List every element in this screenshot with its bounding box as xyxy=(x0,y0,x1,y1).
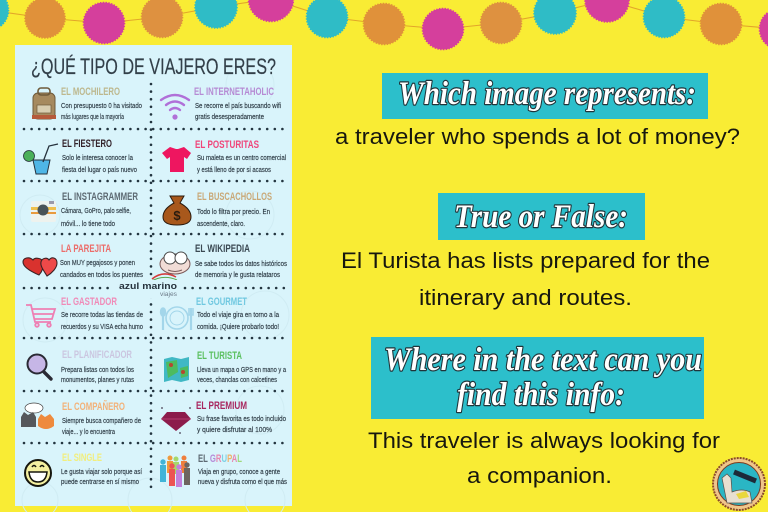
icon: hearts xyxy=(23,258,57,276)
entry: El Mochilero: más lugares que la mayoría xyxy=(61,112,125,121)
entry: El Premium: Su frase favorita es todo incluido xyxy=(197,414,286,423)
entry: El Posturitas: Su maleta es un centro comercial xyxy=(197,153,286,162)
question 2 heading box xyxy=(438,193,645,240)
entry: El Grupal: EL GRUPAL xyxy=(198,453,242,465)
entry: El Planificador: Prepara listas con todos los xyxy=(61,365,134,374)
entry: El Gourmet: comida. ¡Quiere probarlo todo! xyxy=(197,322,279,331)
entry: El Buscachollos: ascendente, claro. xyxy=(197,219,245,228)
entry: El Turista: Lleva un mapa o GPS en mano y a xyxy=(197,365,287,374)
logo: azul marino viajes xyxy=(117,274,179,298)
entry: El Grupal: Viaja en grupo, conoce a gente xyxy=(198,467,280,476)
entry: El Grupal xyxy=(160,453,287,487)
dotted grid xyxy=(24,84,288,488)
question 3 heading box xyxy=(371,337,704,419)
entry: El Compañero: viaje... y lo encuentra xyxy=(62,427,116,436)
title: ¿QUÉ TIPO DE VIAJERO ERES? xyxy=(31,54,276,79)
entry: El Instagrammer: Cámara, GoPro, palo selfie, xyxy=(61,206,131,215)
entry: El Planificador: monumentos, planes y rutas xyxy=(61,375,134,384)
entry: El Instagrammer: EL INSTAGRAMMER xyxy=(62,191,138,203)
entry: El Gastador: recuerdos y su VISA echa humo xyxy=(61,322,143,331)
entry: El Turista xyxy=(164,350,287,384)
entry: El Gastador: Se recorre todas las tiendas de xyxy=(61,310,143,319)
entry: El Gastador: EL GASTADOR xyxy=(61,296,117,308)
question 1 text: a traveler who spends a lot of money? xyxy=(335,124,740,149)
question 1 heading box: Which image represents: xyxy=(398,76,696,112)
entry: El Single xyxy=(25,452,143,486)
entry: El Mochilero xyxy=(32,86,142,121)
icon: magnifying glass xyxy=(28,354,51,379)
logo: azul marino viajes: viajes xyxy=(160,292,177,298)
entry: El Wikipedia xyxy=(160,243,287,279)
entry: El Mochilero: EL MOCHILERO xyxy=(61,86,120,98)
entry: El Premium: y quiere disfrutar al 100% xyxy=(197,425,272,434)
entry: El Turista: EL TURISTA xyxy=(197,350,242,362)
entry: El Single: puede centrarse en sí mismo xyxy=(61,477,139,486)
entry: El Buscachollos: Todo lo filtra por precio. En xyxy=(197,207,270,216)
icon: grinning face xyxy=(25,460,51,486)
icon: t-shirt xyxy=(162,147,191,172)
entry: El Internetaholic: gratis desesperadamente xyxy=(195,112,264,121)
entry: El Gourmet xyxy=(161,296,280,331)
entry: El Compañero: Siempre busca compañero de xyxy=(62,416,141,425)
entry: El Fiestero: Solo le interesa conocer la xyxy=(62,153,134,162)
icon: backpack xyxy=(32,88,56,119)
entry: El Premium: EL PREMIUM xyxy=(196,400,247,412)
entry: El Posturitas xyxy=(162,139,286,174)
entry: El Compañero: EL COMPAÑERO xyxy=(62,400,125,413)
entry: El Compañero xyxy=(21,400,141,436)
entry: El Internetaholic: EL INTERNETAHOLIC xyxy=(194,86,274,98)
entry: El Wikipedia: EL WIKIPEDIA xyxy=(195,243,250,255)
entry: El Mochilero: Con presupuesto 0 ha visitado xyxy=(61,101,142,110)
entry: El Fiestero: EL FIESTERO xyxy=(62,138,112,150)
entry: El Single: Le gusta viajar solo porque así xyxy=(61,467,143,476)
entry: El Turista: veces, chanclas con calcetines xyxy=(197,375,277,384)
entry: El Premium xyxy=(161,400,286,434)
entry: La Parejita: LA PAREJITA xyxy=(61,243,111,255)
icon: wifi xyxy=(161,95,189,118)
entry: El Single: EL SINGLE xyxy=(62,452,102,464)
question 3 text: a companion. xyxy=(467,463,612,488)
entry: El Posturitas: y está lleno de por si acasos xyxy=(197,165,271,174)
question 3 heading box: Where in the text can you xyxy=(384,342,702,378)
entry: El Wikipedia: de memoria y le gusta relataros xyxy=(195,270,280,279)
question 3 text: This traveler is always looking for xyxy=(368,428,720,453)
entry: El Instagrammer xyxy=(31,191,138,228)
badge: llama logo xyxy=(713,458,765,510)
question 2 text: El Turista has lists prepared for the xyxy=(341,248,710,273)
entry: El Grupal: nueva y disfruta como el que más xyxy=(198,477,287,486)
question 3 heading box: find this info: xyxy=(457,377,625,413)
entry: El Gastador xyxy=(26,296,143,331)
entry: El Planificador: EL PLANIFICADOR xyxy=(62,349,132,361)
entry: El Planificador xyxy=(28,349,134,384)
entry: El Buscachollos xyxy=(163,191,272,228)
entry: La Parejita xyxy=(23,243,143,279)
entry: El Instagrammer: móvil... lo tiene todo xyxy=(61,219,115,228)
question 2 text xyxy=(341,248,710,310)
entry: El Internetaholic xyxy=(161,86,281,121)
entry: La Parejita: Son MUY pegajosos y ponen xyxy=(60,258,135,267)
icon: group of people xyxy=(160,456,190,487)
entry: La Parejita: candados en todos los puentes xyxy=(60,270,143,279)
icon: plate and cutlery xyxy=(161,307,193,330)
entry: El Gourmet: EL GOURMET xyxy=(196,296,247,308)
panel: infographic ¿Qué tipo de viajero eres? xyxy=(15,45,292,512)
icon: drink xyxy=(24,144,58,174)
icon: glasses face xyxy=(160,252,190,274)
pom-pom garland xyxy=(0,0,768,50)
logo: azul marino viajes: azul marino xyxy=(119,281,177,292)
entry: El Internetaholic: Se recorre el país buscando wifi xyxy=(195,101,281,110)
entry: El Gourmet: Todo el viaje gira en torno a la xyxy=(197,310,280,319)
question 2 heading box: True or False: xyxy=(454,199,628,235)
icon: cats with speech bubble xyxy=(21,403,54,429)
entry: El Buscachollos: EL BUSCACHOLLOS xyxy=(197,191,272,203)
question 2 text: itinerary and routes. xyxy=(419,285,632,310)
question 1 heading box xyxy=(382,73,708,119)
icon: shopping cart xyxy=(26,305,55,327)
entry: El Fiestero xyxy=(24,138,137,174)
question 3 text xyxy=(368,428,720,488)
entry: El Fiestero: fiesta del lugar o país nuevo xyxy=(62,165,137,174)
icon: money bag: $ xyxy=(173,208,181,223)
icon: map xyxy=(164,357,189,382)
icon: camera xyxy=(31,201,56,222)
entry: El Wikipedia: Se sabe todos los datos históricos xyxy=(195,259,287,268)
icon: diamond xyxy=(161,407,191,434)
entry: El Posturitas: EL POSTURITAS xyxy=(195,139,259,151)
